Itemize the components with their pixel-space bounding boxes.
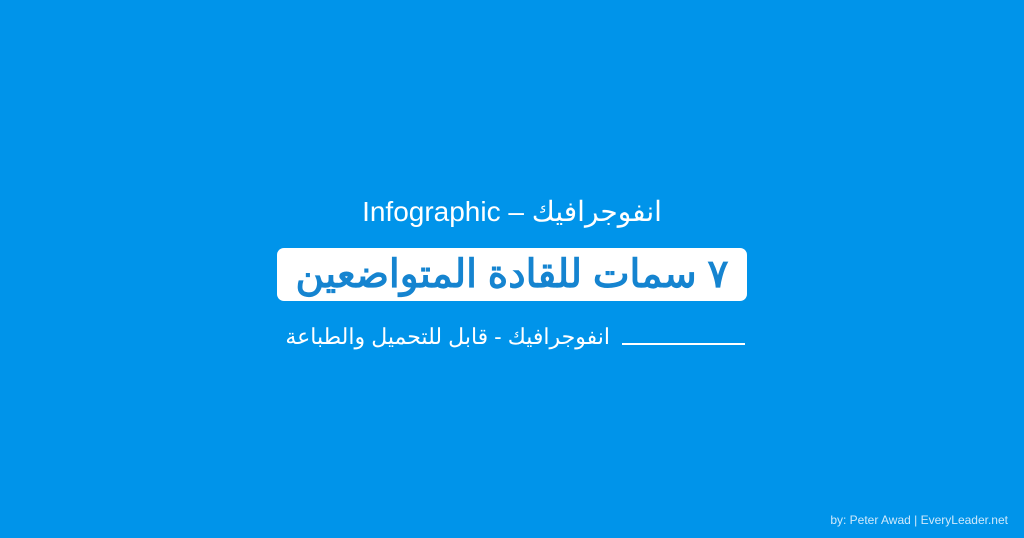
subtitle: انفوجرافيك - قابل للتحميل والطباعة xyxy=(285,324,610,349)
title box xyxy=(277,248,747,301)
title text: ٧ سمات للقادة المتواضعين xyxy=(296,253,728,296)
underline decoration xyxy=(622,343,745,345)
heading: infographic label: انفوجرافيك – Infographic xyxy=(362,196,662,227)
credit: by: Peter Awad | EveryLeader.net xyxy=(830,513,1008,527)
